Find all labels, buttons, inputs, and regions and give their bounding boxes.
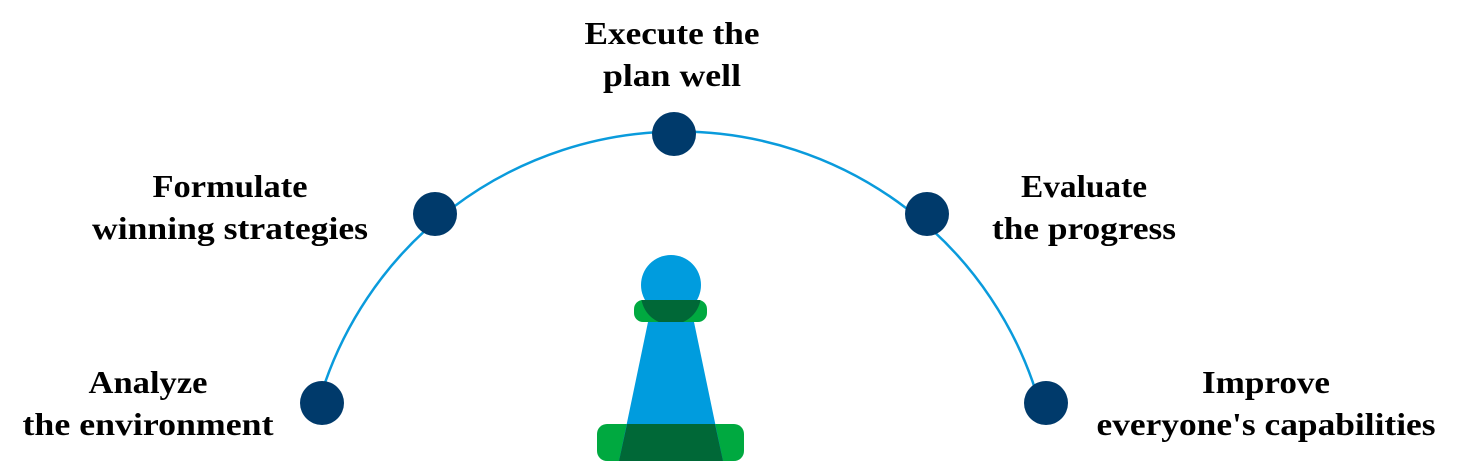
dot: execute bbox=[652, 112, 696, 156]
label: evaluate: the progress bbox=[992, 210, 1176, 246]
label: improve: everyone's capabilities bbox=[1096, 406, 1436, 442]
label: execute: plan well bbox=[603, 57, 741, 93]
label: formulate bbox=[92, 168, 368, 246]
label: improve: Improve bbox=[1202, 364, 1330, 400]
dot: evaluate bbox=[905, 192, 949, 236]
label: execute: Execute the bbox=[584, 15, 760, 51]
label: evaluate: Evaluate bbox=[1021, 168, 1147, 204]
dot: analyze bbox=[300, 381, 344, 425]
label: analyze: the environment bbox=[22, 406, 274, 442]
icon: pawn bbox=[597, 255, 744, 461]
arc path bbox=[318, 132, 1040, 405]
label: evaluate bbox=[992, 168, 1176, 246]
label: analyze: Analyze bbox=[88, 364, 208, 400]
label: improve bbox=[1096, 364, 1436, 442]
dot: formulate bbox=[413, 192, 457, 236]
label: execute bbox=[584, 15, 760, 93]
label: analyze bbox=[22, 364, 274, 442]
label: formulate: Formulate bbox=[152, 168, 308, 204]
dot: improve bbox=[1024, 381, 1068, 425]
label: formulate: winning strategies bbox=[92, 210, 368, 246]
